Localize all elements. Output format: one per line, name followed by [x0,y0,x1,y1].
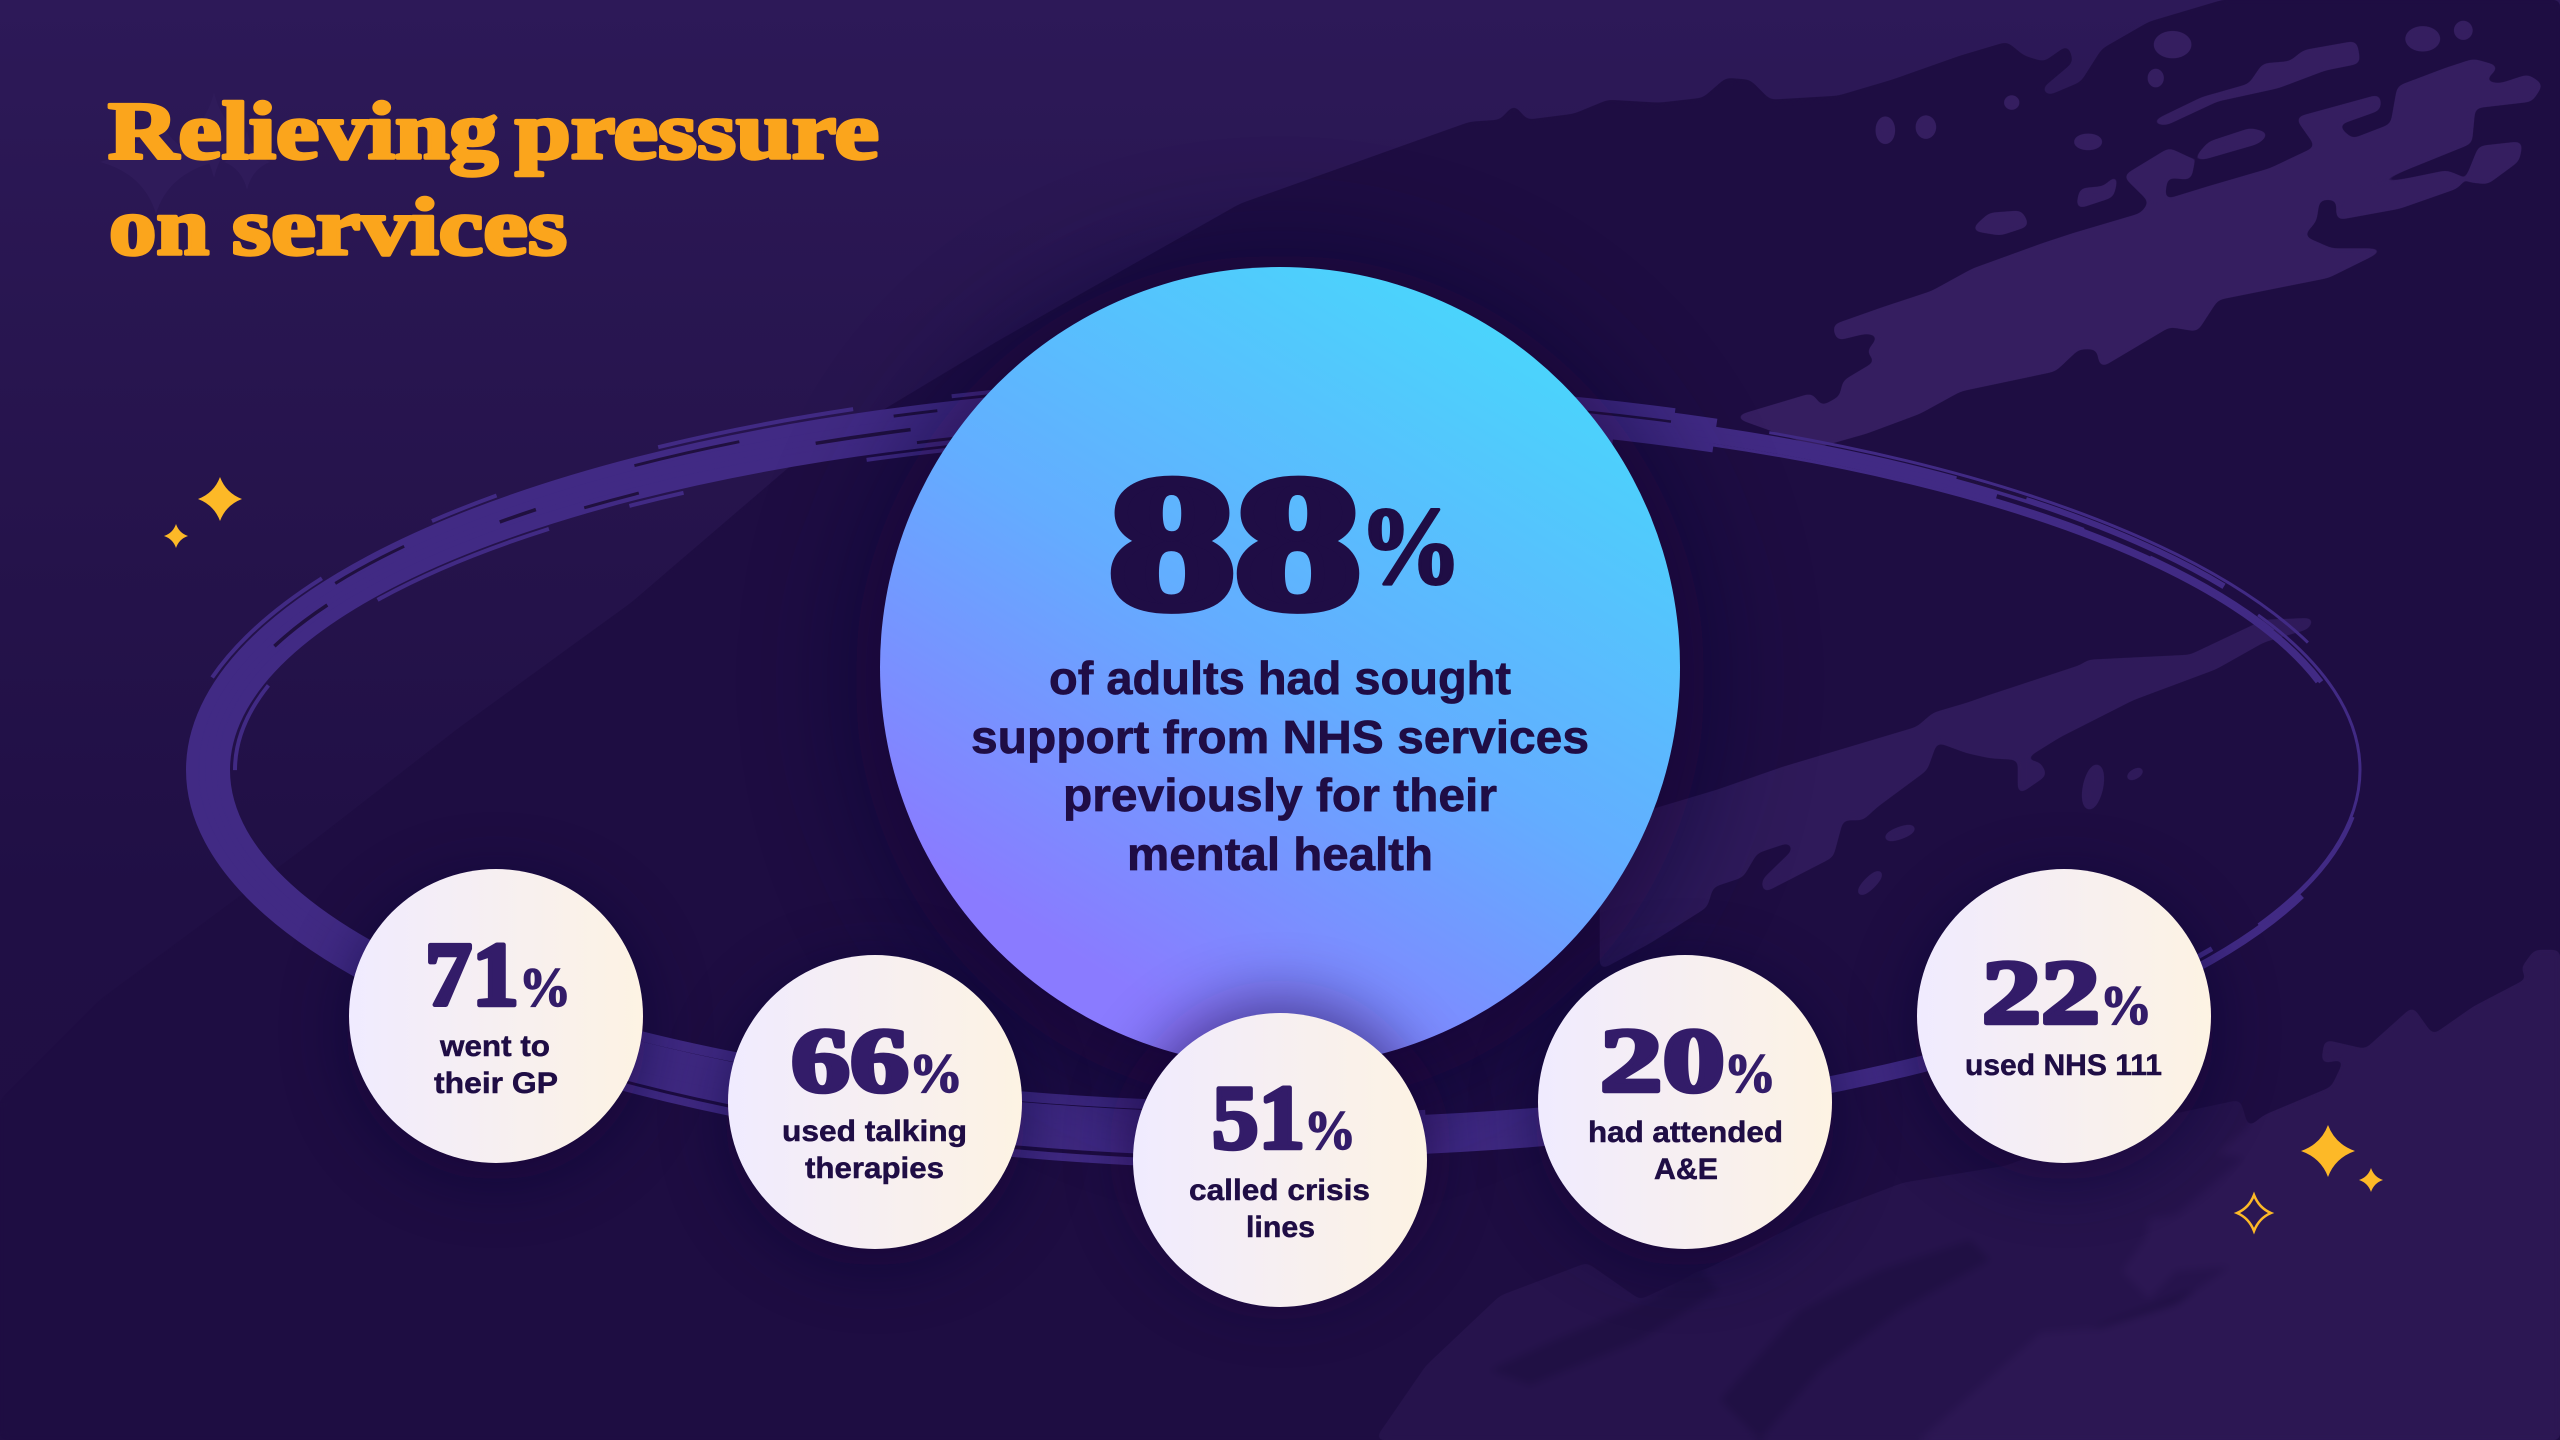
panel: 20% had attended A&E: had attended [1588,1116,1783,1149]
faint stars behind title [100,92,270,214]
brush stroke ring [178,375,2390,1165]
top right paint streaks [1737,21,2541,446]
icon: sparkles bottom right [2237,1125,2383,1231]
title: on [109,181,209,272]
panel: 51% called crisis lines [1133,1013,1427,1307]
panel: 20% had attended A&E: A&E [1654,1153,1718,1186]
title: Relieving [108,85,498,176]
panel: 22% used NHS 111 [1917,869,2211,1163]
panel: 66% used talking therapies: 66 [791,1010,909,1111]
big number 88%: 88 [1109,439,1361,649]
panel: 51% called crisis lines: 51 [1212,1067,1305,1168]
panel: 20% had attended A&E: % [1724,1043,1776,1104]
big number 88% [1109,439,1462,649]
main statistic description: mental health [1127,828,1433,880]
title: pressure [515,85,879,176]
panel: main statistic circle [880,267,1680,1067]
main statistic description: of adults had sought [1049,652,1511,704]
icon: sparkles top left [164,477,242,548]
panel: 66% used talking therapies [728,955,1022,1249]
middle right paint streak [1600,618,2315,970]
panel: 66% used talking therapies: used talking [782,1115,967,1148]
panel: 66% used talking therapies: % [909,1043,963,1104]
panel: 71% went to their GP [349,869,643,1163]
shadow cast by 51% circle [1130,1000,1430,1300]
panel: 22% used NHS 111: used NHS 111 [1965,1049,2162,1082]
main statistic description: previously for their [1063,769,1497,821]
panel: 71% went to their GP: their GP [434,1067,558,1100]
panel: 51% called crisis lines: % [1304,1100,1356,1161]
title: services [232,181,567,272]
main statistic description [971,652,1589,880]
lower right wash and veins [1375,950,2560,1440]
central dark glow [346,255,2214,1266]
panel: 71% went to their GP: % [519,957,571,1018]
big number 88%: % [1359,485,1462,607]
panel: 51% called crisis lines: lines [1246,1211,1315,1244]
title [108,85,879,272]
panel: 20% had attended A&E [1538,955,1832,1249]
panel: 22% used NHS 111: % [2100,975,2152,1036]
panel: 66% used talking therapies: therapies [805,1152,944,1185]
panel: 20% had attended A&E: 20 [1600,1010,1725,1111]
main statistic description: support from NHS services [971,711,1589,763]
panel: 22% used NHS 111: 22 [1982,942,2100,1043]
panel: 51% called crisis lines: called crisis [1189,1174,1370,1207]
panel: 71% went to their GP: 71 [425,924,519,1025]
panel: 71% went to their GP: went to [439,1030,550,1063]
